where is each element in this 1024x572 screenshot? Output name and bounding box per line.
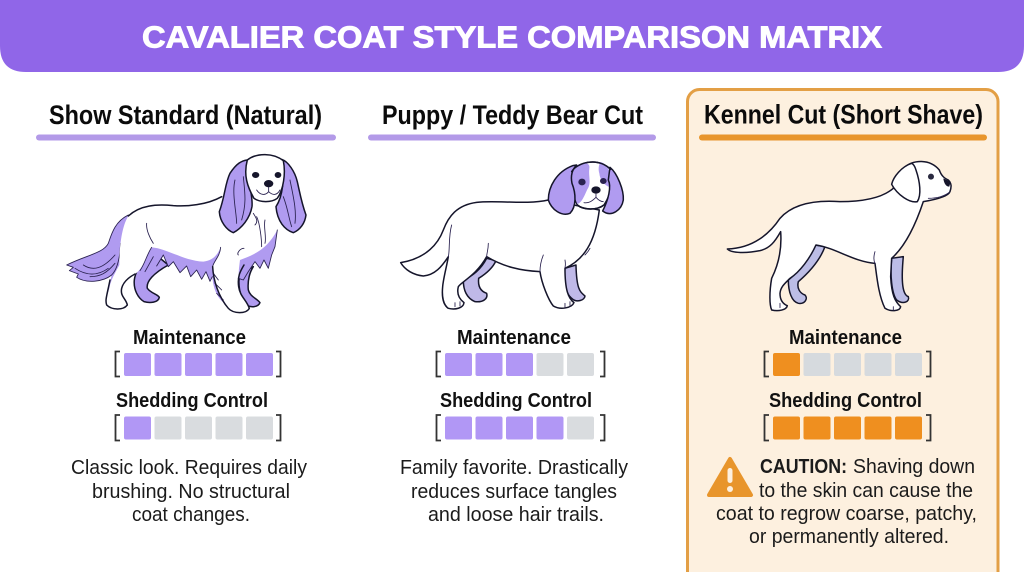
caution text: to the skin can cause the: [759, 479, 973, 502]
label: maintenance: Maintenance: [789, 327, 902, 349]
label: maintenance: Maintenance: [457, 327, 571, 349]
rating: maintenance 5 of 5: [116, 352, 280, 376]
panel: show standard: [36, 100, 336, 526]
description: show standard: brushing. No structural: [92, 480, 290, 503]
illustration: teddy bear cut dog: [401, 162, 623, 309]
rating: maintenance 3 of 5: [436, 352, 604, 376]
label: maintenance: Maintenance: [133, 327, 246, 349]
rating: shedding 4 of 5: [436, 415, 604, 440]
heading: show standard: Show Standard (Natural): [49, 100, 322, 130]
description: puppy cut: and loose hair trails.: [428, 503, 604, 526]
panel: kennel cut: [688, 90, 998, 572]
caution text: coat to regrow coarse, patchy,: [716, 502, 977, 525]
description: show standard: coat changes.: [132, 503, 250, 526]
description: puppy cut: reduces surface tangles: [411, 480, 617, 503]
description: show standard: Classic look. Requires daily: [71, 456, 308, 479]
rating: shedding 1 of 5: [116, 415, 280, 440]
caution text: [716, 455, 977, 548]
heading: puppy cut: Puppy / Teddy Bear Cut: [382, 100, 643, 130]
label: shedding control: Shedding Control: [769, 390, 922, 412]
icon: warning triangle: [709, 459, 751, 495]
illustration: natural coat dog: [67, 155, 306, 313]
rating: shedding 5 of 5: [764, 415, 930, 440]
rating: maintenance 1 of 5: [764, 352, 930, 376]
panel: puppy cut: [368, 100, 656, 526]
illustration: short shave dog: [727, 162, 951, 311]
label: shedding control: Shedding Control: [440, 390, 592, 412]
label: shedding control: Shedding Control: [116, 390, 268, 412]
heading: kennel cut: Kennel Cut (Short Shave): [704, 100, 983, 130]
title banner: [0, 0, 1024, 72]
description: puppy cut: Family favorite. Drastically: [400, 456, 629, 479]
caution text: Shaving down: [853, 455, 975, 478]
caution text: or permanently altered.: [749, 525, 949, 548]
title banner: CAVALIER COAT STYLE COMPARISON MATRIX: [142, 20, 883, 54]
caution text: CAUTION:: [760, 455, 847, 478]
description: puppy cut: [400, 456, 629, 526]
description: show standard: [71, 456, 308, 526]
